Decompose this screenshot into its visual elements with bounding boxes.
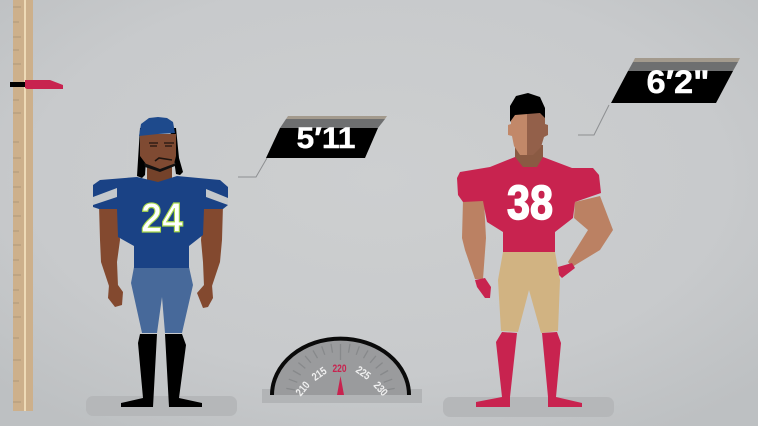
socks and boots xyxy=(121,334,202,407)
player: 49ers 38 xyxy=(457,93,613,407)
gauge labels: 215 xyxy=(310,365,329,384)
right arm and hip xyxy=(568,196,613,267)
scale platform xyxy=(262,389,422,403)
gauge ticks xyxy=(286,344,395,390)
height callout: 6'2" xyxy=(578,58,740,135)
gauge needle xyxy=(337,376,344,395)
jersey number: 38 xyxy=(507,177,553,230)
floor shadow: left player xyxy=(86,396,237,416)
height callout: 6'2": 6′2" xyxy=(646,64,710,100)
height marker xyxy=(10,80,63,89)
cap xyxy=(139,117,175,136)
sleeve stripes xyxy=(93,188,117,205)
gloves xyxy=(475,263,575,298)
neck xyxy=(147,165,172,184)
weight scale xyxy=(262,338,422,403)
gauge labels xyxy=(294,363,390,399)
player: Seahawks 24 xyxy=(93,117,228,407)
hair xyxy=(137,128,183,178)
beard xyxy=(144,163,176,172)
gauge rim xyxy=(272,339,409,395)
pants xyxy=(131,267,193,333)
gauge labels: 225 xyxy=(353,364,373,383)
left arm xyxy=(462,200,486,279)
gauge dial xyxy=(272,338,409,395)
socks and cleats xyxy=(476,332,582,407)
jersey xyxy=(457,157,601,252)
height callout: 5'11: 5′11 xyxy=(296,122,356,155)
height callout: 5'11 xyxy=(238,116,387,177)
gauge labels: 210 xyxy=(294,379,313,399)
hair xyxy=(510,93,545,122)
facial features xyxy=(149,143,174,161)
neck xyxy=(515,145,543,170)
face xyxy=(508,112,527,155)
arms xyxy=(99,205,223,286)
pants xyxy=(498,252,560,333)
face xyxy=(140,134,176,171)
face shadow xyxy=(527,112,548,155)
gauge labels: 220 xyxy=(332,363,346,375)
hands xyxy=(108,285,213,308)
floor shadow: right player xyxy=(443,397,614,417)
jersey xyxy=(93,176,228,268)
jersey number: 24 xyxy=(141,194,184,241)
gauge labels: 230 xyxy=(371,380,390,399)
height ruler xyxy=(10,0,63,411)
